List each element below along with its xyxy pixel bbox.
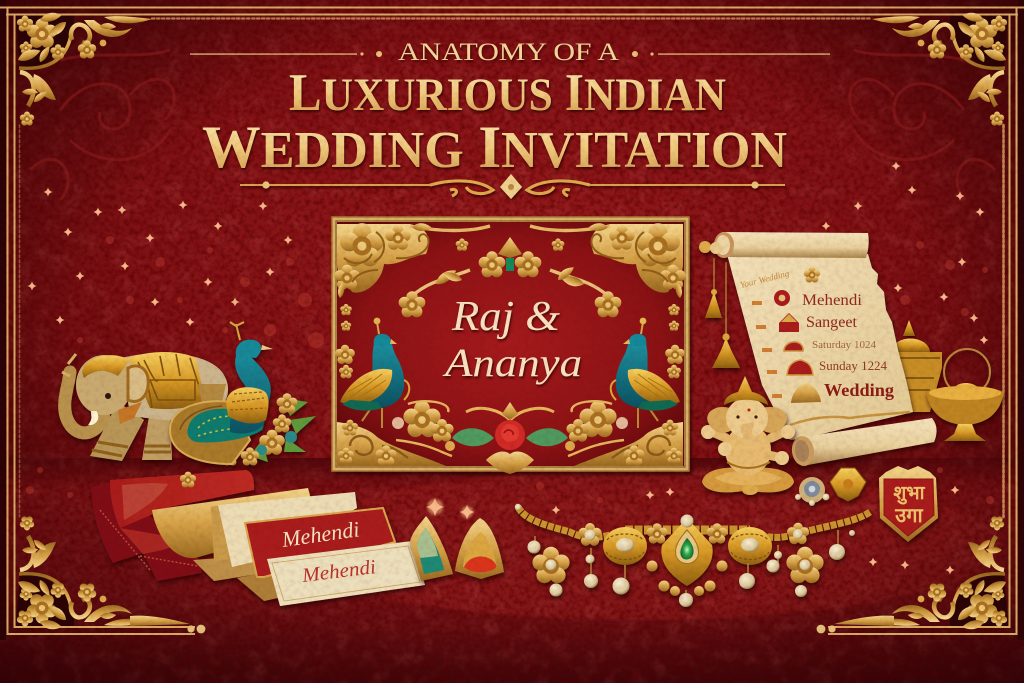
elephant bbox=[62, 352, 228, 461]
cream card bbox=[267, 541, 425, 606]
couple names: Raj & bbox=[451, 294, 560, 340]
corner ornament: bottom right bbox=[817, 516, 1008, 633]
jewels bbox=[795, 468, 866, 506]
scroll paper bbox=[727, 254, 913, 440]
corner ornament: top right bbox=[872, 12, 1008, 126]
bottom roller bbox=[790, 418, 937, 467]
Mehendi row: Mehendi bbox=[802, 292, 863, 309]
center emerald pendant bbox=[646, 514, 728, 607]
trunk bbox=[65, 372, 104, 433]
card peacock left bbox=[340, 318, 409, 428]
peacock with foliage bbox=[170, 322, 316, 466]
diya lamp bbox=[926, 349, 1004, 441]
crown bbox=[724, 376, 768, 405]
caparison blanket bbox=[128, 352, 205, 409]
necklace bbox=[515, 504, 870, 607]
urn bbox=[888, 320, 942, 412]
ganesha bbox=[701, 376, 795, 495]
chain bbox=[518, 507, 870, 537]
Saturday row bbox=[784, 340, 877, 351]
red card bbox=[245, 508, 395, 577]
head bbox=[236, 340, 261, 358]
stationery stack bbox=[91, 470, 425, 606]
arms bbox=[708, 430, 788, 458]
body bbox=[122, 353, 228, 421]
gold folded sheet bbox=[152, 488, 312, 558]
shagun badge: उगा bbox=[894, 505, 924, 527]
red card: Mehendi bbox=[279, 516, 361, 552]
Sangeet row bbox=[779, 313, 858, 332]
couple names: Ananya bbox=[442, 340, 582, 385]
invitation card bbox=[332, 217, 692, 475]
corner ornament: top left bbox=[16, 12, 152, 126]
tail fan bbox=[170, 401, 250, 464]
card bottom floral bbox=[452, 402, 568, 474]
card side borders bbox=[335, 304, 685, 378]
damask pattern bbox=[30, 50, 995, 200]
row bullets bbox=[752, 301, 782, 398]
heading line 2: WEDDING INVITATION bbox=[202, 114, 787, 180]
heading line 1: LUXURIOUS INDIAN bbox=[289, 64, 726, 122]
Sunday row: Sunday 1224 bbox=[819, 359, 888, 373]
title bbox=[190, 39, 830, 199]
shagun badge: शुभा bbox=[893, 483, 926, 505]
corner ornament: bottom left bbox=[16, 516, 205, 633]
Sangeet row: Sangeet bbox=[806, 314, 858, 331]
hanging bells bbox=[705, 258, 740, 368]
shagun badge bbox=[879, 466, 938, 542]
cream card: Mehendi bbox=[300, 556, 377, 587]
Wedding row bbox=[791, 380, 894, 403]
red top sheet bbox=[110, 470, 254, 528]
couple names bbox=[442, 294, 582, 385]
top roller bbox=[699, 232, 869, 258]
right lobe bbox=[728, 527, 772, 565]
orange cone bbox=[455, 518, 504, 579]
cream sheet bbox=[218, 492, 357, 567]
Sunday row bbox=[787, 359, 888, 375]
left lobe bbox=[603, 527, 647, 565]
gift cones bbox=[410, 516, 504, 581]
sparkles by cones bbox=[426, 498, 474, 519]
kicker line ornament bbox=[190, 51, 830, 57]
Saturday row: Saturday 1024 bbox=[812, 340, 877, 351]
card corner ornaments bbox=[334, 221, 686, 466]
card peacock right bbox=[611, 318, 680, 428]
ears bbox=[707, 407, 732, 433]
foliage bbox=[222, 393, 316, 466]
title flourish bbox=[240, 174, 785, 199]
Wedding row: Wedding bbox=[824, 380, 894, 400]
scroll heading bbox=[739, 267, 820, 290]
schedule bbox=[752, 290, 910, 425]
torso bbox=[725, 425, 771, 475]
red back sheet bbox=[91, 482, 202, 581]
scroll heading: Your Wedding bbox=[739, 268, 791, 290]
legs bbox=[90, 402, 144, 461]
pendant drops right bbox=[739, 523, 855, 597]
teal cone bbox=[410, 516, 453, 581]
legs bbox=[702, 468, 794, 492]
gold lower sheets bbox=[193, 555, 262, 581]
gold flap bbox=[211, 504, 240, 561]
kicker: ANATOMY OF A bbox=[398, 39, 619, 66]
Mehendi row bbox=[774, 290, 863, 309]
scroll bbox=[699, 232, 937, 467]
glitter field bbox=[26, 161, 994, 594]
head bbox=[76, 355, 132, 415]
head bbox=[726, 398, 768, 438]
red fold under bbox=[120, 528, 190, 554]
card top arch bbox=[399, 237, 621, 317]
pendant drops left bbox=[528, 523, 686, 598]
wing bbox=[226, 387, 268, 423]
